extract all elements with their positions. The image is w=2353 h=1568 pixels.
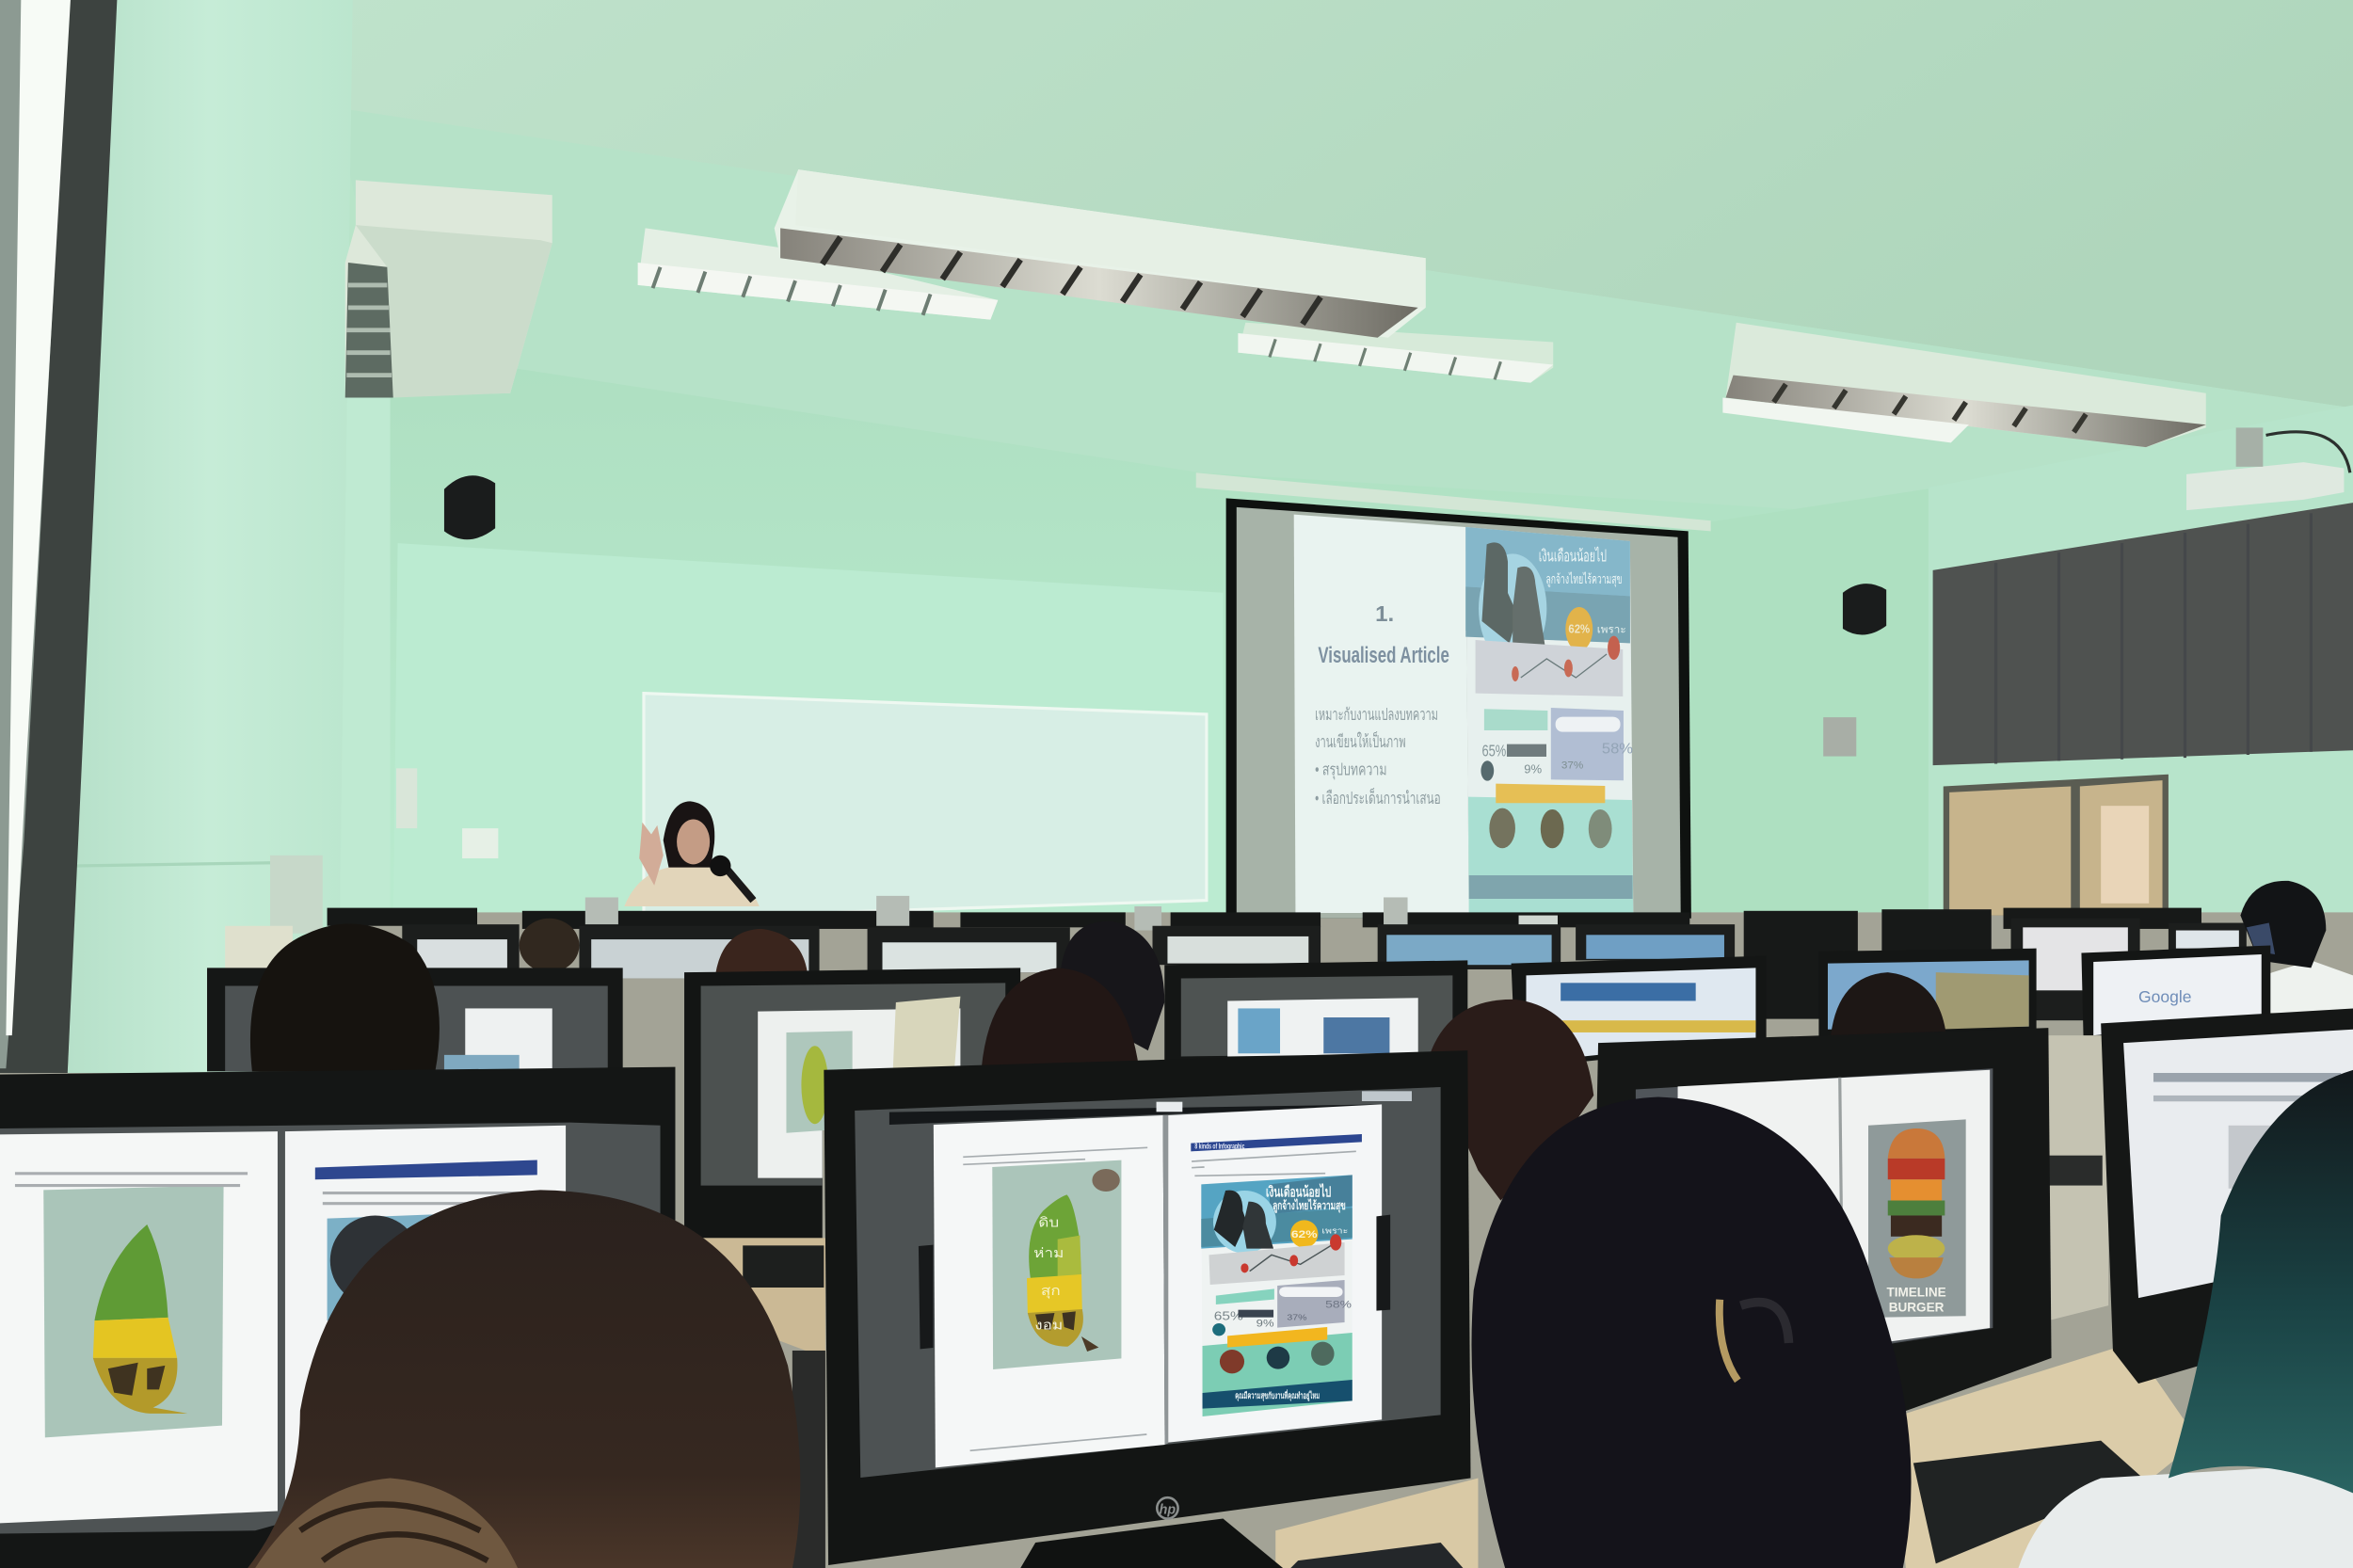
student head bbox=[982, 968, 1139, 1068]
article thumbnail bbox=[328, 1209, 564, 1320]
keyboard bbox=[1913, 1441, 2143, 1563]
presenter bbox=[624, 801, 760, 906]
left page text lines bbox=[963, 1147, 1147, 1450]
monitor: right front bbox=[2101, 1008, 2353, 1384]
ceiling soffit bbox=[338, 108, 2353, 570]
banana bbox=[93, 1224, 187, 1414]
infographic page: ลูกจ้างไทยไร้ความสุข bbox=[1273, 1197, 1346, 1213]
banana poster: ห่าม bbox=[1033, 1246, 1064, 1261]
infographic page: เงินเดือนน้อยไป bbox=[1266, 1183, 1331, 1200]
ceiling lights bbox=[638, 169, 2206, 447]
monitor: front centre bbox=[824, 1050, 1471, 1568]
banana poster: งอม bbox=[1034, 1319, 1063, 1333]
student head bbox=[716, 929, 808, 972]
monitor 2 bbox=[684, 968, 1020, 1238]
desks and keyboards bbox=[675, 1035, 2199, 1568]
window curtain bbox=[1933, 503, 2353, 765]
slide infographic bbox=[1465, 527, 1633, 913]
light 4 bbox=[1722, 323, 2206, 447]
infographic page: 9% bbox=[1257, 1317, 1274, 1329]
infographic page: คุณมีความสุขกับงานที่คุณทำอยู่ไหม bbox=[1235, 1388, 1320, 1402]
side handles bbox=[919, 1245, 933, 1349]
slide infographic: เพราะ bbox=[1597, 625, 1626, 636]
air conditioner bbox=[345, 180, 552, 398]
pillar bbox=[68, 0, 353, 1073]
foreground students bbox=[248, 1070, 2353, 1568]
head bbox=[2240, 881, 2326, 968]
left speaker bbox=[444, 475, 495, 539]
banana labels: ดิบ bbox=[1038, 1216, 1059, 1230]
whiteboard bbox=[644, 694, 1207, 919]
slide heading: Visualised Article bbox=[1318, 643, 1449, 668]
HP logo bbox=[1157, 1497, 1178, 1519]
slide infographic: 62% bbox=[1568, 622, 1591, 636]
slide body text: • เลือกประเด็นการนำเสนอ bbox=[1315, 787, 1441, 808]
article heading bbox=[1191, 1134, 1362, 1151]
burger illustration: BURGER bbox=[1889, 1301, 1945, 1315]
monitor 1 bbox=[207, 968, 623, 1071]
burger illustration bbox=[1868, 1119, 1966, 1318]
book spread on screen: 8 kinds of Infographic bbox=[1194, 1143, 1244, 1150]
infographic page: 62% bbox=[1291, 1228, 1318, 1240]
burger illustration: TIMELINE bbox=[1886, 1286, 1946, 1300]
presenter top bbox=[624, 868, 760, 906]
projector bbox=[2186, 427, 2350, 510]
right wall bbox=[1929, 405, 2353, 1020]
ranking strip bbox=[1476, 640, 1623, 696]
left page bbox=[934, 1115, 1165, 1467]
right speaker bbox=[1843, 584, 1886, 635]
presenter face bbox=[677, 820, 710, 864]
third row monitors bbox=[207, 945, 2270, 1238]
door bbox=[1944, 775, 2169, 916]
speakers bbox=[444, 475, 1886, 635]
article text lines bbox=[1192, 1151, 1356, 1176]
infographic page bbox=[1201, 1175, 1353, 1416]
slide body text bbox=[1315, 704, 1441, 808]
light 1 bbox=[638, 228, 998, 320]
infographic page: 58% bbox=[1325, 1298, 1352, 1310]
monitor 3 bbox=[1164, 960, 1467, 1061]
mask bbox=[2247, 923, 2275, 954]
window frame bbox=[0, 0, 117, 1073]
banana body bbox=[1029, 1194, 1081, 1280]
monitor: burger page bbox=[1591, 1028, 2052, 1426]
light 2 bbox=[775, 169, 1426, 338]
left desk bbox=[675, 1238, 825, 1358]
monitor: front left bbox=[0, 1067, 675, 1568]
student head bbox=[520, 919, 579, 972]
monitor 8: Google page bbox=[2081, 945, 2270, 1141]
slide infographic: ลูกจ้างไทยไร้ความสุข bbox=[1545, 571, 1622, 587]
lab floor fill bbox=[0, 912, 2353, 1568]
right page bbox=[285, 1126, 566, 1508]
student: brown hair left bbox=[248, 1190, 800, 1568]
slide body text: งานเขียนให้เป็นภาพ bbox=[1315, 730, 1406, 751]
hair clip bbox=[1720, 1300, 1737, 1381]
slide body text: • สรุปบทความ bbox=[1315, 760, 1387, 780]
banana poster bbox=[992, 1160, 1121, 1369]
infographic page: 37% bbox=[1287, 1314, 1307, 1322]
student: black hair centre bbox=[1471, 1097, 1912, 1568]
second row monitors bbox=[402, 919, 2247, 1020]
slide: Visualised Article bbox=[1294, 515, 1633, 913]
monitor 5 bbox=[1818, 949, 2037, 1038]
slide infographic: 58% bbox=[1602, 741, 1633, 758]
lower teal section bbox=[1468, 797, 1633, 913]
right upper desk bbox=[2048, 1035, 2108, 1320]
banana poster bbox=[43, 1186, 224, 1437]
ceiling bbox=[333, 0, 2353, 408]
back wall bbox=[383, 348, 1936, 931]
front centre desk bbox=[1275, 1478, 1478, 1568]
mid students bbox=[250, 924, 1946, 1201]
monitor: front left: เงินเดือน bbox=[412, 1223, 499, 1248]
monitor bezel bbox=[824, 1050, 1471, 1565]
microphone bbox=[720, 861, 753, 901]
lower wall panel bbox=[393, 543, 1223, 919]
infographic page: 65% bbox=[1214, 1309, 1243, 1322]
student head bbox=[250, 924, 440, 1071]
monitor 8: Google page: Google bbox=[2138, 987, 2192, 1006]
portrait circle bbox=[1479, 553, 1546, 664]
student long hair bbox=[1429, 1000, 1593, 1201]
slide number: 1. bbox=[1375, 602, 1394, 627]
paper cards bbox=[585, 896, 1558, 960]
front right desk bbox=[1891, 1343, 2199, 1568]
hair tie bbox=[1741, 1303, 1789, 1343]
page gutter bbox=[1163, 1115, 1168, 1445]
student head bbox=[1831, 972, 1946, 1035]
monitor stand bbox=[1020, 1519, 1283, 1568]
monitor: front centre: hp bbox=[1160, 1503, 1176, 1518]
wall section above door bbox=[1689, 488, 1936, 931]
62% badge bbox=[1565, 607, 1593, 651]
viewer toolbar bbox=[889, 1104, 1382, 1125]
slide infographic: 65% bbox=[1481, 742, 1507, 760]
infographic title: เงินเดือนน้อยไป bbox=[1539, 547, 1607, 566]
student head bbox=[1061, 921, 1164, 1050]
back students bbox=[520, 919, 1164, 1050]
light 3 bbox=[1238, 323, 1553, 383]
man with mask bbox=[2240, 881, 2353, 1013]
screen background bbox=[855, 1087, 1441, 1478]
presenter hand bbox=[639, 823, 664, 886]
slide body text: เหมาะกับงานแปลงบทความ bbox=[1315, 704, 1438, 724]
article heading bar bbox=[315, 1160, 537, 1179]
banana poster: สุก bbox=[1041, 1284, 1061, 1299]
wall fixtures bbox=[225, 717, 1856, 971]
slide infographic: 37% bbox=[1561, 760, 1583, 772]
infographic page: เพราะ bbox=[1321, 1227, 1348, 1236]
factor stats bbox=[1484, 709, 1547, 730]
book spread on screen bbox=[855, 1087, 1441, 1478]
shirt bbox=[2263, 960, 2353, 1013]
monitor 4 bbox=[1512, 956, 1767, 1068]
slide infographic: 9% bbox=[1524, 762, 1542, 776]
back row monitors bbox=[328, 896, 2201, 1019]
presenter hair bbox=[664, 801, 714, 886]
student: teal hair right bbox=[2018, 1070, 2353, 1568]
left page bbox=[0, 1131, 278, 1523]
projection screen bbox=[1196, 472, 1711, 919]
page text lines bbox=[15, 1174, 540, 1204]
right page bbox=[1168, 1104, 1382, 1443]
